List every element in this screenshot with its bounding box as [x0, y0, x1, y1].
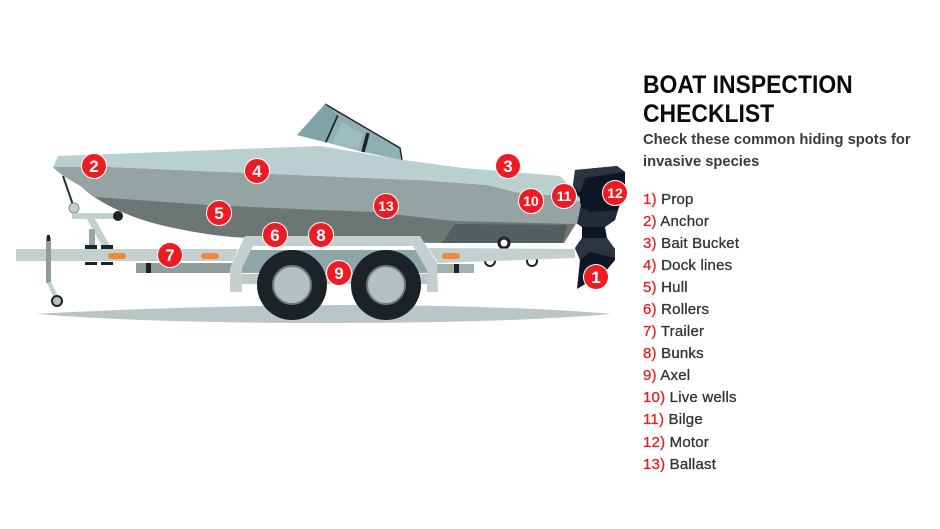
- checklist: 13) Ballast: [643, 456, 716, 473]
- checklist: 3) Bait Bucket: [643, 235, 739, 252]
- marker 6: rollers: 6: [270, 226, 280, 245]
- hull wheel: [499, 238, 509, 248]
- title: [643, 71, 853, 128]
- checklist: 7) Trailer: [643, 323, 704, 340]
- windshield: [297, 104, 402, 160]
- marker 9: axel: [326, 260, 352, 286]
- hull: [53, 146, 581, 248]
- checklist: 4) Dock lines: [643, 257, 732, 274]
- checklist: 6) Rollers: [643, 301, 709, 318]
- small wheels under the rear rail: [485, 256, 537, 266]
- marker 1: prop: [584, 264, 608, 290]
- marker 2: anchor: [82, 154, 106, 178]
- outboard motor: [573, 166, 625, 289]
- trailer main rail: [16, 249, 238, 261]
- checklist: 12) Motor: [643, 434, 709, 451]
- subtitle: Check these common hiding spots for: [643, 131, 911, 148]
- marker 7: trailer: 7: [165, 246, 175, 265]
- dark transom panel: [442, 224, 567, 243]
- checklist: 9) Axel: [643, 367, 690, 384]
- marker 12: motor: 12: [607, 185, 623, 201]
- marker 2: anchor: 2: [89, 157, 99, 176]
- checklist: 11) Bilge: [643, 411, 703, 428]
- marker 5: hull: 5: [214, 204, 224, 223]
- title: BOAT INSPECTION: [643, 71, 853, 99]
- marker 1: prop: 1: [591, 268, 601, 287]
- deck: [53, 146, 580, 202]
- marker 9: axel: 9: [334, 264, 344, 283]
- anchor line and bow stop: [63, 176, 118, 246]
- orange reflectors: [108, 253, 460, 259]
- checklist: [643, 190, 740, 473]
- trailer under-panel between wheels: [240, 250, 430, 273]
- marker 7: trailer: [158, 242, 182, 268]
- marker 10: live wells: [518, 188, 544, 214]
- marker 11: bilge: [552, 184, 576, 208]
- marker 11: bilge: 11: [557, 188, 572, 204]
- hull lower band: [82, 187, 577, 243]
- checklist: 8) Bunks: [643, 345, 704, 362]
- marker 12: motor: [602, 180, 628, 206]
- lower beam front: [136, 263, 246, 273]
- marker 3: bait bucket: [496, 154, 520, 178]
- hitch brackets: [85, 245, 113, 265]
- marker 3: bait bucket: 3: [503, 157, 513, 176]
- marker 4: dock lines: 4: [252, 162, 262, 181]
- marker 13: ballast: [374, 194, 398, 218]
- marker 6: rollers: [262, 222, 288, 248]
- jack stand: [46, 237, 51, 283]
- subtitle: [643, 131, 911, 170]
- subtitle: invasive species: [643, 153, 759, 170]
- checklist: 1) Prop: [643, 190, 694, 208]
- lower beam rear: [430, 264, 474, 273]
- checklist: 10) Live wells: [643, 389, 737, 406]
- trailer wheel: left: [257, 250, 327, 320]
- ground shadow: [36, 305, 611, 323]
- marker 10: live wells: 10: [523, 193, 539, 209]
- marker 5: hull: [206, 200, 232, 226]
- marker 8: bunks: [308, 222, 334, 248]
- checklist: 2) Anchor: [643, 213, 709, 230]
- marker 4: dock lines: [244, 158, 270, 184]
- marker 8: bunks: 8: [316, 226, 326, 245]
- bow roller: [113, 211, 123, 221]
- marker 13: ballast: 13: [378, 198, 394, 214]
- trailer wheel: right: [351, 250, 421, 320]
- trailer: [16, 235, 575, 306]
- bunk rail: [230, 236, 438, 292]
- hull middle band: [53, 167, 581, 224]
- title: CHECKLIST: [643, 100, 774, 128]
- checklist: 5) Hull: [643, 279, 688, 296]
